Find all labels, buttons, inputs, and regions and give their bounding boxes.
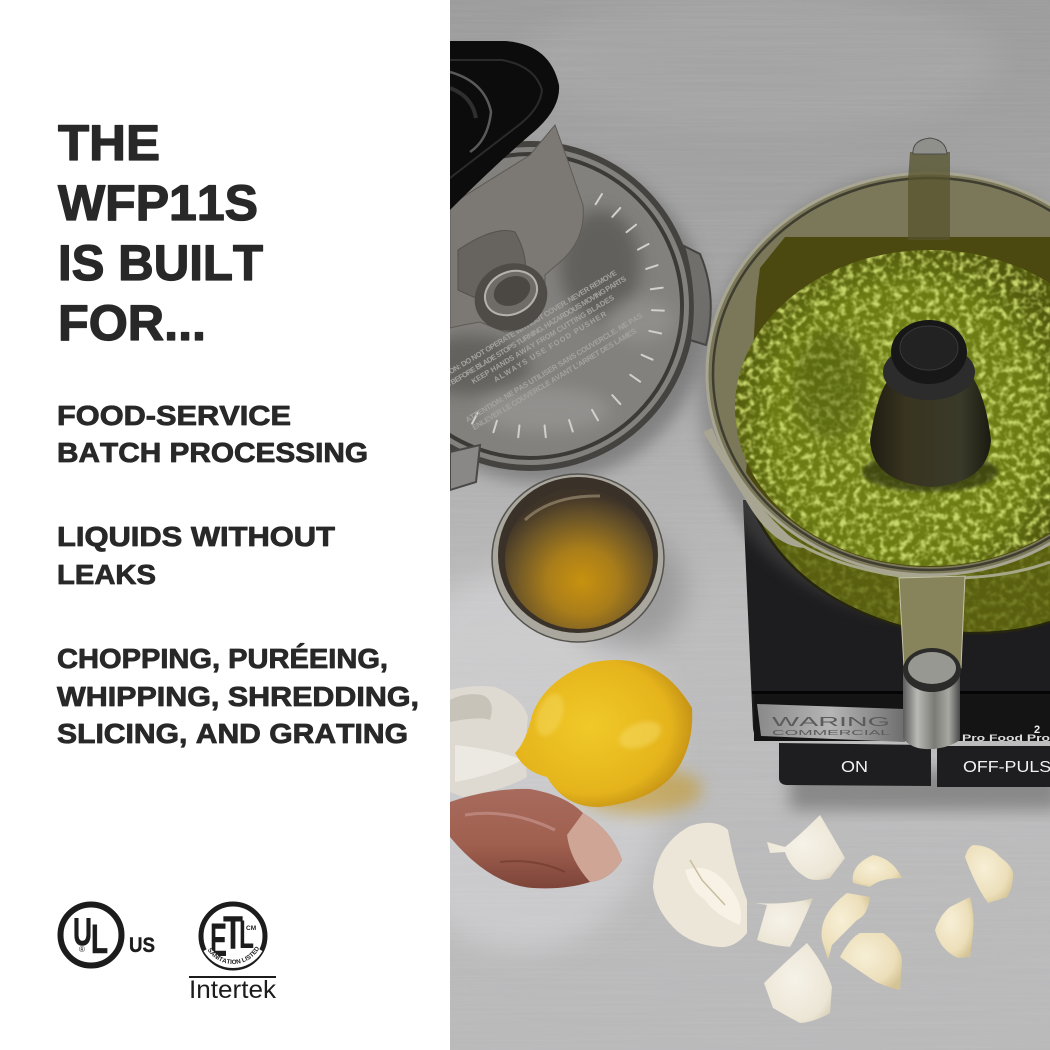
clove H [935,897,974,958]
icon: UL US certification mark [60,904,155,966]
bowl rim body [707,173,1050,575]
processor shadow [790,770,1050,810]
oil bowl shadow [565,530,685,650]
model label [962,726,1050,741]
stainless steel surface [450,0,1050,1050]
bowl shadow on steel [694,169,1011,606]
use case: liquids without leaks: LIQUIDS WITHOUT [57,521,335,552]
garlic bulb center [653,823,747,947]
clove B [853,855,902,887]
transparent lid [450,141,712,491]
headline: IS BUILT [58,235,263,291]
nameplate: COMMERCIAL [772,730,890,737]
icon: ETL sanitation listed Intertek mark: CM [246,925,256,932]
use case: chopping, pureeing, whipping, shredding, slicing, grating: WHIPPING, SHREDDING, [57,681,419,712]
icon: ETL sanitation listed Intertek mark: L [239,913,254,957]
shallot [450,789,622,888]
bowl lower rim band [790,536,1050,580]
lid latch lower left [450,445,480,490]
icon: ETL sanitation listed Intertek mark: T [223,906,243,959]
lid shadow [450,160,713,490]
peel C [755,898,813,947]
lower left rim piece [703,428,803,548]
lid embossed text: KEEP HANDS AWAY FROM CUTTING BLADES [470,293,616,386]
white text panel [0,0,450,1050]
clove G [965,845,1013,903]
use case: chopping, pureeing, whipping, shredding, slicing, grating: CHOPPING, PURÉEING, [57,643,388,674]
clove D [822,893,870,960]
lower bowl wall with pesto behind [752,511,1050,634]
garlic peels and cloves [755,815,1013,1023]
pesto surface [730,245,1050,570]
chute ring [474,263,548,331]
bowl lock tab [908,152,950,240]
lid embossed text: CAUTION: DO NOT OPERATE WITHOUT COVER. NEVER REMOVE [429,268,618,387]
lid embossed text: LID BEFORE BLADE STOPS TURNING. HAZARDOUS MOVING PARTS [439,274,628,393]
headline: THE [58,115,160,171]
headline [58,115,263,351]
nameplate: WARING [772,714,890,729]
lid embossed text: ALWAYS USE FOOD PUSHER [492,309,609,384]
icon: ETL sanitation listed Intertek mark [189,902,277,1004]
product photo [450,0,1050,1050]
use case: food-service batch processing: FOOD-SERVICE [57,400,291,431]
oil layer [740,237,1050,580]
use case: food-service batch processing: BATCH PROCESSING [57,437,368,468]
icon: ETL sanitation listed Intertek mark: Intertek [189,976,277,1004]
lid embossed text: ENLEVER LE COUVERCLE AVANT L'ARRET DES LAMES [471,326,638,432]
nameplate [757,704,905,742]
lid shading [450,205,680,432]
lid embossed text: ATTENTION: NE PAS UTILISER SANS COUVERCLE. NE PAS [464,311,644,424]
lemon shadow [578,766,702,814]
OFF-PULSE button [937,746,1050,787]
icon: ETL sanitation listed Intertek mark: E [210,913,227,966]
icon: ETL sanitation listed Intertek mark: SANITATION LISTED [208,946,259,964]
icon: UL US certification mark: L [91,916,108,962]
feed chute [450,41,583,343]
icon: UL US certification mark: ® [79,945,85,954]
use case: chopping, pureeing, whipping, shredding, slicing, grating: SLICING, AND GRATING [57,718,408,749]
ON button: ON [841,759,868,776]
lemon [515,660,692,807]
ON button [779,743,931,786]
icon: UL US certification mark: US [129,934,155,957]
use case: food-service batch processing [57,400,368,468]
use case: liquids without leaks: LEAKS [57,559,156,590]
pusher black top [450,41,559,210]
processor base with controls [743,500,1050,787]
model label: Pro Food Pro [962,733,1050,743]
use case: liquids without leaks [57,521,335,590]
garlic bulb left [450,686,528,797]
center post shadow [862,452,998,492]
pour spout [899,576,965,749]
clove E [840,933,902,990]
headline: WFP11S [58,175,258,231]
icon: UL US certification mark: U [73,911,92,954]
center post [870,378,991,487]
use case: chopping, pureeing, whipping, shredding, slicing, grating [57,643,419,749]
peel A [767,815,845,880]
bowl of oil [492,474,664,642]
lid tick marks [472,194,664,437]
peel F [764,943,832,1023]
processor bowl [703,138,1050,640]
model label: 2 [1034,724,1040,736]
headline: FOR... [58,295,206,351]
lid latch right [684,246,711,345]
lid embossed text [450,270,642,430]
